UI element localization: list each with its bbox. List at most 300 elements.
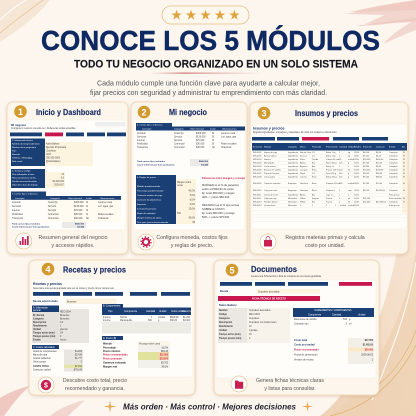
spreadsheet preview: Componente — [124, 310, 138, 313]
intro text — [90, 80, 327, 97]
spreadsheet preview: Diferencia entre margen y recargo — [202, 177, 245, 180]
spreadsheet preview: Red social — [12, 161, 23, 163]
spreadsheet preview: $38,00 — [376, 176, 383, 178]
spreadsheet preview: Tiempo pasivo (min) — [33, 336, 56, 338]
spreadsheet preview: Ingrediente — [288, 165, 299, 168]
spreadsheet preview: Activo — [60, 338, 67, 342]
spreadsheet preview — [216, 280, 376, 378]
spreadsheet preview: Publicidad — [137, 144, 148, 146]
spreadsheet preview: Versión de receta — [294, 358, 314, 362]
spreadsheet preview: g — [348, 173, 349, 175]
spreadsheet preview: 100 — [339, 183, 343, 185]
spreadsheet preview: $40.000 — [196, 147, 205, 149]
spreadsheet preview: $1.000.000 — [52, 181, 65, 183]
spreadsheet preview: Impuesto — [137, 203, 147, 206]
spreadsheet preview: $3.800 — [363, 166, 370, 168]
spreadsheet preview: Cantidad — [339, 146, 347, 148]
spreadsheet preview: Receta seleccionada — [33, 300, 58, 303]
spreadsheet preview: $136.817 — [54, 184, 65, 186]
spreadsheet preview: $70,00 — [376, 183, 383, 185]
spreadsheet preview: Comisión de plataformas — [137, 198, 162, 202]
spreadsheet preview: Unidad — [348, 146, 354, 148]
spreadsheet preview: Mantequilla — [120, 319, 132, 322]
spreadsheet preview: Código — [219, 314, 228, 316]
spreadsheet preview: Frasco — [326, 202, 333, 204]
spreadsheet preview: 6,0 — [61, 178, 65, 180]
spreadsheet preview: 100% — [354, 194, 359, 196]
panel: mi negocio — [131, 102, 247, 254]
spreadsheet preview: Ingrediente — [288, 154, 299, 158]
spreadsheet preview: INGREDIENTES / COMPONENTES — [314, 310, 352, 312]
spreadsheet preview: Éxito — [312, 176, 317, 178]
spreadsheet preview: Cupcakes con buttercream — [249, 321, 277, 324]
spreadsheet preview: Brownies — [60, 318, 70, 320]
spreadsheet preview: unidad — [348, 205, 354, 207]
spreadsheet preview: 1 — [335, 205, 337, 207]
icon: money seal: $ — [44, 382, 48, 390]
spreadsheet preview: Incauca — [300, 156, 308, 158]
spreadsheet preview: Internet — [137, 139, 145, 142]
spreadsheet preview: 1. Información básica — [12, 139, 34, 142]
spreadsheet preview: Alpina — [300, 162, 306, 164]
spreadsheet preview: Haz de Oros — [300, 152, 311, 154]
description: Descubre costo total, precio — [63, 378, 127, 384]
spreadsheet preview: ml — [348, 198, 351, 200]
spreadsheet preview: Nombre — [219, 310, 228, 312]
spreadsheet preview: Servicio — [48, 205, 57, 208]
badge 3 — [258, 107, 270, 119]
spreadsheet preview: Incluir — [86, 197, 92, 200]
spreadsheet preview: Harina de trigo — [264, 151, 278, 154]
spreadsheet preview: Éxito — [312, 182, 317, 185]
spreadsheet preview: 100% — [354, 190, 359, 192]
spreadsheet preview: $30.000 — [196, 144, 205, 146]
spreadsheet preview: REC-0004 — [60, 312, 71, 314]
badge 1: 1 — [18, 107, 23, 117]
spreadsheet preview: Método predeterminado — [137, 185, 161, 188]
spreadsheet preview: $108,33 — [376, 170, 384, 172]
spreadsheet preview: unidad — [158, 317, 166, 319]
intro text: Cada módulo cumple una función clave para ayudarte a calcular mejor, — [97, 80, 320, 88]
panel: documentos — [214, 260, 379, 395]
spreadsheet preview: Servicios — [12, 205, 22, 208]
spreadsheet preview: Receta — [220, 290, 229, 293]
spreadsheet preview: Categoría — [219, 317, 230, 320]
spreadsheet preview: $7.914 — [75, 366, 83, 368]
spreadsheet preview: Ara — [312, 162, 316, 164]
spreadsheet preview: Días trabajados al mes — [12, 173, 35, 176]
spreadsheet preview: Costo indirecto por hora productiva — [137, 164, 175, 166]
spreadsheet preview: Completo — [389, 151, 398, 154]
title: CONOCE LOS 5 MÓDULOS — [41, 25, 380, 56]
spreadsheet preview: Nombre del emprendimiento — [12, 142, 40, 146]
spreadsheet preview: Margen sobre — [177, 181, 192, 184]
heading: Recetas y precios — [63, 264, 126, 274]
spreadsheet preview: kg — [348, 156, 350, 158]
spreadsheet preview: Rendimiento — [33, 324, 48, 328]
spreadsheet preview: INS-0011 — [253, 194, 262, 196]
icon: shopping bag — [260, 234, 276, 250]
spreadsheet preview: Genérico — [300, 190, 309, 192]
badge 5 — [226, 264, 238, 276]
spreadsheet preview: $30.000 — [74, 214, 83, 216]
spreadsheet preview: INS-0010 — [253, 190, 262, 192]
spreadsheet preview: Categoría — [174, 128, 184, 130]
spreadsheet preview: Tiempo activo (min) — [33, 332, 55, 334]
spreadsheet preview: Cantidad — [146, 310, 156, 313]
spreadsheet preview: 30 — [339, 159, 342, 161]
spreadsheet preview: Materiales — [288, 204, 297, 207]
description: Registra materias primas y calcula — [285, 235, 365, 241]
spreadsheet preview: Extensores de vainilla — [294, 318, 317, 321]
spreadsheet preview: $130.000 — [74, 206, 84, 208]
spreadsheet preview: Sí — [212, 140, 215, 142]
spreadsheet preview: Porcentaje — [103, 346, 116, 350]
spreadsheet preview: 100% — [354, 198, 359, 200]
spreadsheet preview: Categoría — [33, 318, 44, 320]
spreadsheet preview: 1/2 — [60, 322, 64, 324]
spreadsheet preview: Marca — [300, 146, 306, 148]
spreadsheet preview: Crema de leche — [264, 194, 279, 196]
description: costo por unidad. — [305, 243, 345, 249]
spreadsheet preview: Redes sociales — [98, 214, 114, 216]
spreadsheet preview: Sí — [403, 190, 405, 192]
spreadsheet preview: Corona — [300, 176, 307, 178]
spreadsheet preview: Sí — [403, 198, 405, 200]
spreadsheet preview: gramos — [60, 328, 69, 331]
badge 2 — [138, 106, 150, 118]
spreadsheet preview: D1 — [312, 152, 315, 154]
spreadsheet preview: COP — [46, 154, 51, 156]
spreadsheet preview: Precio mínimo — [103, 350, 121, 353]
spreadsheet preview: 300 — [148, 320, 153, 322]
spreadsheet preview: $3,80 — [376, 166, 382, 168]
spreadsheet preview: Costo total — [294, 339, 307, 342]
spreadsheet preview: g — [158, 320, 160, 322]
spreadsheet preview: Servicio — [174, 136, 183, 138]
spreadsheet preview: C. Costos calculados — [33, 346, 55, 349]
spreadsheet preview: INS-0004 — [253, 162, 262, 164]
spreadsheet preview: Fondant blanco — [264, 200, 279, 204]
spreadsheet preview: Ingrediente — [288, 162, 299, 164]
spreadsheet preview: 3. Costos fijos e indirectos — [137, 124, 163, 126]
spreadsheet preview: Selecciona una receta guardada para ver su costeo y precio. El ver tiempo real. — [33, 287, 114, 290]
spreadsheet preview: Cápsulas cupcake — [264, 183, 281, 185]
spreadsheet preview: 5 — [346, 324, 348, 326]
description — [63, 378, 127, 392]
spreadsheet preview: Costo indirecto por hora productiva — [12, 226, 50, 228]
spreadsheet preview: 50% -> precio $75.000. — [202, 215, 230, 219]
spreadsheet preview: general — [33, 309, 41, 312]
spreadsheet preview: Sí — [212, 133, 215, 135]
spreadsheet preview: ml — [348, 170, 351, 172]
rating stars badge: ★★★★★ — [170, 8, 240, 24]
spreadsheet preview: 200 — [339, 173, 343, 175]
spreadsheet preview: 1 — [339, 202, 341, 204]
spreadsheet preview: Ara — [312, 165, 316, 168]
spreadsheet preview: $4,20 — [376, 156, 382, 158]
spreadsheet preview: 1 — [339, 166, 341, 168]
spreadsheet preview: $14.000,00 — [376, 202, 387, 204]
spreadsheet preview: ml — [348, 202, 351, 204]
spreadsheet preview: Incluir — [210, 128, 216, 130]
spreadsheet preview: $7.000 — [363, 183, 370, 185]
spreadsheet preview: Sí — [403, 176, 405, 178]
spreadsheet preview: 100% — [354, 176, 359, 178]
spreadsheet preview: $70.000 — [74, 210, 83, 212]
spreadsheet preview: $600,00 — [170, 317, 179, 319]
spreadsheet preview: Mano de obra — [33, 354, 48, 356]
spreadsheet preview: Concepto — [15, 197, 25, 200]
spreadsheet preview: Insignia — [312, 198, 320, 200]
spreadsheet preview: Colombia — [46, 150, 56, 152]
spreadsheet preview: $6.000 — [363, 173, 370, 175]
spreadsheet preview: Incremento previsto — [137, 208, 157, 210]
spreadsheet preview: Completo — [389, 165, 398, 168]
spreadsheet preview: Ej: costo $50.000 y recargo — [202, 211, 235, 215]
spreadsheet preview: Sí — [212, 136, 215, 138]
spreadsheet preview: Éxito — [312, 189, 317, 192]
spreadsheet preview: 0 — [249, 338, 251, 340]
icon: gear — [138, 234, 154, 250]
spreadsheet preview: Frasco 120 ml — [326, 170, 339, 172]
spreadsheet preview: @kalosbakery — [46, 160, 61, 163]
spreadsheet preview: Genérico — [300, 183, 309, 185]
spreadsheet preview: 2026-08-03 — [361, 354, 374, 356]
spreadsheet preview: No — [212, 147, 216, 149]
spreadsheet preview: Costo fijo — [174, 132, 184, 135]
spreadsheet preview: Completo — [389, 176, 398, 178]
spreadsheet preview: Tienda — [312, 159, 319, 161]
spreadsheet preview — [251, 124, 407, 229]
spreadsheet preview: Sí — [86, 202, 89, 204]
spreadsheet preview: Regla de redondeo — [137, 212, 156, 215]
description: y listas para consultar. — [264, 386, 316, 392]
heading: Insumos y precios — [295, 108, 358, 118]
spreadsheet preview: Precio recomendado — [294, 348, 319, 352]
spreadsheet preview: 24 — [61, 174, 65, 176]
spreadsheet preview: 100% — [354, 205, 359, 207]
spreadsheet preview: Recargo sobre costo — [139, 342, 161, 345]
badge 3: 3 — [261, 108, 267, 118]
spreadsheet preview: INS-0002 — [253, 156, 262, 158]
spreadsheet preview: Esencia de vainilla — [264, 170, 281, 172]
spreadsheet preview: $4.000 — [363, 152, 370, 154]
spreadsheet preview: Costo unitario — [171, 310, 186, 313]
spreadsheet preview: Sí — [86, 214, 89, 216]
spreadsheet preview: $18.000 — [363, 159, 371, 161]
spreadsheet preview: 500 — [339, 162, 343, 164]
spreadsheet preview: Caja 1 L — [326, 194, 334, 196]
intro text: fijar precios con seguridad y administrar tu emprendimiento con más claridad. — [90, 90, 327, 97]
spreadsheet preview: $400.000 — [196, 133, 206, 135]
description: y reglas de precio. — [171, 243, 213, 249]
spreadsheet preview: 0 — [81, 362, 83, 364]
footer tagline: Más orden · Más control · Mejores decisiones — [123, 402, 296, 412]
spreadsheet preview: INS-0008 — [253, 176, 262, 178]
spreadsheet preview: Bolsa 1 L — [326, 166, 335, 168]
spreadsheet preview: Rendimiento — [219, 325, 234, 328]
spreadsheet preview: Precio premium — [103, 358, 123, 360]
panel: inicio y dashboard — [7, 102, 128, 254]
spreadsheet preview: Presentación — [326, 146, 338, 148]
spreadsheet preview: $7.500 — [363, 162, 370, 164]
spreadsheet preview: Royal — [300, 173, 306, 175]
spreadsheet preview: Bolsa 250 g — [326, 176, 337, 178]
spreadsheet preview: Ara — [312, 194, 316, 196]
spreadsheet preview: Completo — [389, 158, 398, 161]
spreadsheet preview: Ingrediente — [288, 158, 299, 161]
spreadsheet preview: Costo fijo — [48, 201, 58, 204]
spreadsheet preview: L — [348, 166, 350, 168]
spreadsheet preview: Costo línea — [182, 310, 194, 313]
spreadsheet preview: Registra ingredientes, empaques y materiales. El costo por unidad se calcula solo. — [253, 131, 337, 134]
spreadsheet preview: Recetas y precios — [33, 282, 62, 286]
spreadsheet preview: Alquería — [300, 165, 308, 168]
spreadsheet preview: 100% — [354, 202, 359, 204]
spreadsheet preview: Unidad — [33, 329, 41, 331]
spreadsheet preview: $30.500 — [365, 350, 374, 352]
spreadsheet preview: Publicidad — [12, 214, 23, 216]
spreadsheet preview: Unidad — [219, 330, 227, 332]
spreadsheet preview: Sueldo mensual deseado — [12, 181, 37, 183]
spreadsheet preview: Harina — [120, 316, 127, 319]
spreadsheet preview: $600,00 — [376, 159, 384, 161]
spreadsheet preview: Brownies — [67, 300, 77, 303]
spreadsheet preview: INS-0007 — [253, 173, 262, 175]
spreadsheet preview: Colorante rojo — [294, 322, 309, 326]
spreadsheet preview: Sí — [403, 156, 405, 158]
spreadsheet preview: Empaque — [288, 183, 297, 185]
spreadsheet preview: Unidad — [358, 314, 366, 316]
spreadsheet preview: REC-0003 — [249, 314, 260, 316]
spreadsheet preview: Servicio — [174, 139, 183, 142]
spreadsheet preview: Ganancia estimada — [103, 362, 126, 364]
spreadsheet preview: kg — [348, 152, 350, 154]
spreadsheet preview: L — [348, 194, 350, 196]
spreadsheet preview: 100% — [354, 166, 359, 168]
spreadsheet preview: MARGEN es el % de ganancia — [202, 183, 239, 187]
spreadsheet preview: Ingrediente — [288, 194, 299, 196]
spreadsheet preview: Transporte — [12, 217, 24, 220]
spreadsheet preview: Cupcakes decorados — [258, 290, 280, 293]
spreadsheet preview: Sí — [403, 183, 405, 185]
spreadsheet preview: Sí — [403, 170, 405, 172]
spreadsheet preview: Huevos — [264, 159, 271, 161]
spreadsheet preview: $17.784 — [365, 339, 374, 342]
spreadsheet preview: Tarro 200 g — [326, 173, 336, 175]
spreadsheet preview: 1 — [372, 360, 374, 362]
spreadsheet preview: 545 — [343, 319, 348, 321]
spreadsheet preview: Costo por — [376, 146, 385, 148]
spreadsheet preview: $4.444 — [201, 164, 209, 166]
spreadsheet preview: Completo — [389, 189, 398, 192]
spreadsheet preview: $4.444 — [77, 226, 85, 228]
spreadsheet preview: $4.200 — [75, 351, 83, 353]
spreadsheet preview: País — [12, 150, 17, 152]
spreadsheet preview: No — [86, 218, 90, 220]
spreadsheet preview: 1 — [339, 152, 341, 154]
spreadsheet preview: Descripción — [33, 322, 47, 324]
spreadsheet preview: 1 — [339, 190, 341, 192]
spreadsheet preview: 1 — [326, 205, 328, 207]
spreadsheet preview: 0,0% — [190, 204, 195, 206]
badge 1 — [14, 105, 27, 118]
spreadsheet preview: ID insumo — [253, 146, 263, 148]
description: Resumen general del negocio — [39, 235, 108, 241]
spreadsheet preview: Comercial — [174, 146, 185, 149]
spreadsheet preview: Insumo — [103, 320, 111, 322]
spreadsheet preview: 12 — [249, 326, 252, 328]
spreadsheet preview: INS-0001 — [253, 152, 262, 154]
spreadsheet preview: 100% — [354, 170, 359, 172]
spreadsheet preview: Bolsa 1 kg — [326, 156, 335, 158]
description — [256, 378, 324, 392]
spreadsheet preview: Sí — [403, 173, 405, 175]
spreadsheet preview: $791,40 — [74, 370, 83, 372]
spreadsheet preview: Tipo — [108, 311, 113, 313]
spreadsheet preview: Azúcar blanca — [264, 154, 278, 158]
spreadsheet preview: Barra 500 g — [326, 162, 336, 164]
spreadsheet preview: Fecha de generación — [294, 354, 318, 356]
spreadsheet preview: 30 — [249, 334, 252, 336]
spreadsheet preview: Sí — [403, 159, 405, 161]
spreadsheet preview: Ejemplo Propietaria — [46, 146, 67, 149]
spreadsheet preview: INS-0006 — [253, 170, 262, 172]
spreadsheet preview: Valor mensual — [190, 128, 204, 130]
spreadsheet preview: Redes sociales — [221, 144, 237, 146]
spreadsheet preview: Insumo — [103, 317, 111, 319]
spreadsheet preview: Materiales — [288, 197, 297, 200]
spreadsheet preview: $11.000 — [160, 354, 169, 356]
spreadsheet preview: 0,0% — [190, 200, 195, 202]
spreadsheet preview: 1 — [60, 326, 62, 328]
spreadsheet preview: Precio de — [363, 146, 372, 148]
spreadsheet preview: 30,0% — [161, 366, 168, 368]
spreadsheet preview: 1 — [339, 194, 341, 196]
spreadsheet preview: Servicio — [48, 209, 57, 212]
spreadsheet preview — [133, 120, 245, 230]
spreadsheet preview: Mi negocio — [11, 123, 26, 127]
spreadsheet preview: Otros costos — [33, 360, 47, 364]
spreadsheet preview: 250 — [339, 176, 343, 178]
spreadsheet preview: Brownies — [60, 314, 70, 317]
spreadsheet preview: Kalos Bakery — [219, 303, 237, 307]
subtitle underline — [150, 72, 262, 74]
spreadsheet preview: Valor mensual — [68, 197, 82, 200]
description — [285, 235, 365, 249]
spreadsheet preview: Comercial — [48, 217, 59, 220]
spreadsheet preview: Horas productivas al día — [12, 176, 36, 180]
spreadsheet preview: 100% — [354, 152, 359, 154]
spreadsheet preview: $640.000 — [199, 160, 209, 163]
spreadsheet preview: Teléfono / WhatsApp — [12, 156, 33, 160]
spreadsheet preview: Proveedor — [312, 146, 322, 148]
spreadsheet preview: $4.200 — [363, 156, 370, 158]
spreadsheet preview: Caja para torta — [264, 189, 278, 192]
spreadsheet preview: cupcake — [249, 330, 258, 332]
spreadsheet preview: $2.436 — [75, 354, 83, 356]
spreadsheet preview: Comercial — [174, 142, 185, 146]
spreadsheet preview: Sí — [403, 162, 405, 164]
spreadsheet preview: 100% — [354, 156, 359, 158]
description: y accesos rápidos. — [52, 243, 94, 249]
spreadsheet preview: 1 — [300, 205, 302, 207]
spreadsheet preview: 300 000 0000 — [46, 158, 61, 160]
spreadsheet preview: D1 — [312, 156, 315, 158]
spreadsheet preview: Moneda — [12, 154, 21, 156]
spreadsheet preview: Luz, agua, gas — [221, 136, 237, 138]
